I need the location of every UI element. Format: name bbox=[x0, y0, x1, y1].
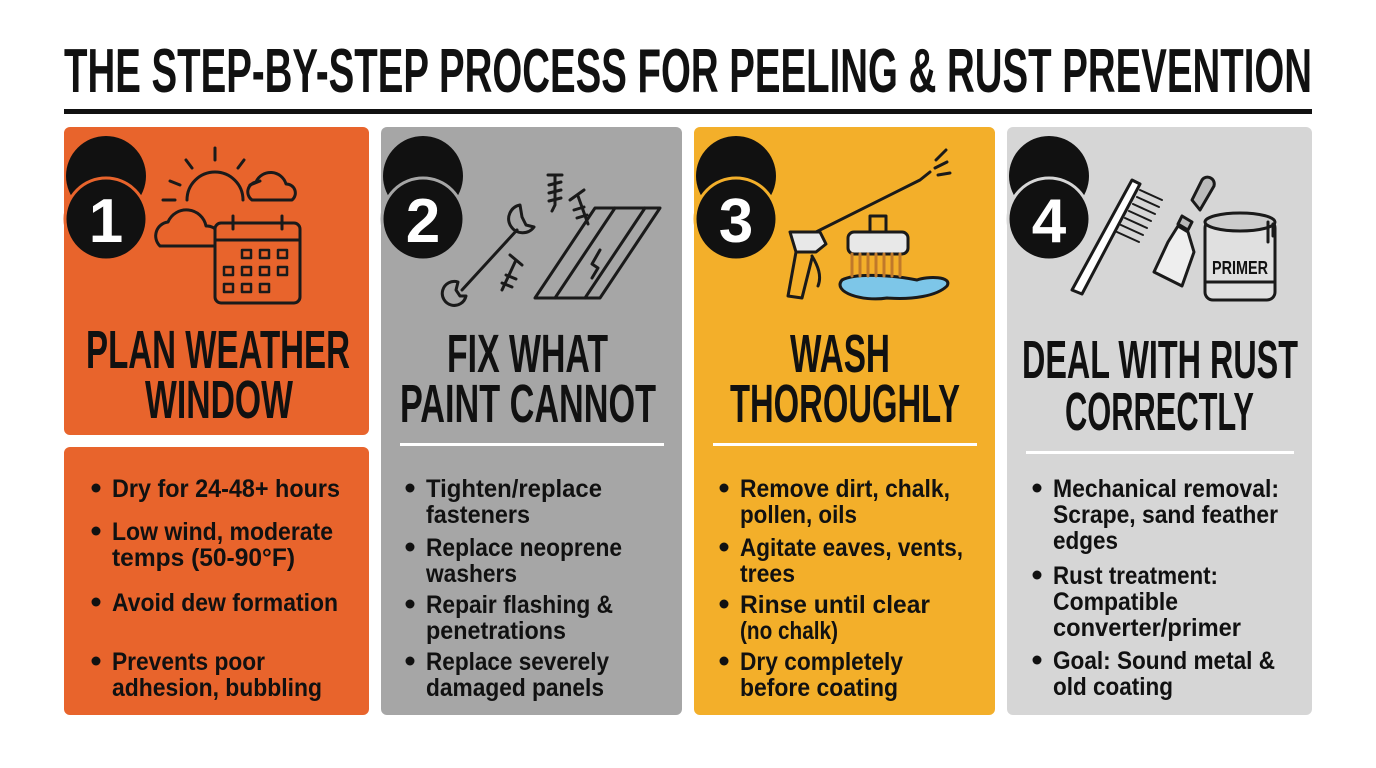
panel: step 2 fix what paint cannot bbox=[381, 127, 682, 715]
icon: wire brush scraper primer can bbox=[1072, 177, 1275, 300]
bullet list: converter/primer bbox=[1053, 614, 1241, 642]
bullet list: Tighten/replace bbox=[426, 475, 602, 503]
bullet list: Remove dirt, chalk, bbox=[740, 475, 950, 503]
bullet list: Dry completely bbox=[740, 648, 903, 676]
number badge 2: 2 bbox=[406, 187, 440, 256]
heading bbox=[1022, 330, 1298, 442]
bullet list: Repair flashing & bbox=[426, 591, 613, 619]
icon: wrench screws panel bbox=[442, 175, 660, 305]
bullet list: damaged panels bbox=[426, 674, 604, 702]
number badge 3 bbox=[695, 136, 777, 260]
bullet list: Agitate eaves, vents, bbox=[740, 534, 963, 562]
bullet list: Replace severely bbox=[426, 648, 609, 676]
bullet list: Prevents poor bbox=[112, 648, 265, 676]
heading bbox=[730, 324, 960, 434]
bullet list: edges bbox=[1053, 527, 1118, 555]
bullet list: Goal: Sound metal & bbox=[1053, 647, 1275, 675]
panel: step 1 plan weather window bbox=[64, 127, 369, 715]
bullet list: Low wind, moderate bbox=[112, 518, 333, 546]
bullet list: temps (50-90°F) bbox=[112, 544, 295, 572]
number badge 4 bbox=[1008, 136, 1090, 260]
bullet list: Scrape, sand feather bbox=[1053, 501, 1278, 529]
heading bbox=[86, 320, 350, 430]
bullet list: Compatible bbox=[1053, 588, 1178, 616]
bullet list: Mechanical removal: bbox=[1053, 475, 1279, 503]
panel: step 3 wash thoroughly bbox=[694, 127, 995, 715]
number badge 2 bbox=[382, 136, 464, 260]
heading: THOROUGHLY bbox=[730, 374, 960, 434]
heading bbox=[400, 324, 656, 434]
bullet list: fasteners bbox=[426, 501, 530, 529]
heading: PLAN WEATHER bbox=[86, 320, 350, 380]
bullet list bbox=[406, 475, 622, 702]
bullet list: before coating bbox=[740, 674, 898, 702]
number badge 1: 1 bbox=[89, 187, 123, 256]
bullet list: Avoid dew formation bbox=[112, 589, 338, 617]
bullet list: trees bbox=[740, 560, 795, 588]
bullet list: pollen, oils bbox=[740, 501, 857, 529]
number badge 1 bbox=[65, 136, 147, 260]
label: primer: PRIMER bbox=[1212, 258, 1268, 278]
number badge 3: 3 bbox=[719, 187, 753, 256]
icon: pressure washer brush bbox=[788, 150, 950, 299]
panel: step 4 deal with rust correctly bbox=[1007, 127, 1312, 715]
icon: sun clouds calendar bbox=[156, 148, 300, 303]
bullet list: (no chalk) bbox=[740, 617, 838, 645]
bullet list bbox=[1032, 475, 1279, 701]
bullet list: Replace neoprene bbox=[426, 534, 622, 562]
heading: PAINT CANNOT bbox=[400, 374, 656, 434]
heading: FIX WHAT bbox=[447, 324, 608, 384]
number badge 4: 4 bbox=[1032, 187, 1067, 256]
bullet list: Rinse until clear bbox=[740, 591, 930, 619]
bullet list: penetrations bbox=[426, 617, 566, 645]
bullet list bbox=[92, 475, 340, 702]
bullet list: old coating bbox=[1053, 673, 1173, 701]
bullet list bbox=[720, 475, 963, 702]
heading: WINDOW bbox=[145, 370, 293, 430]
bullet list: washers bbox=[425, 560, 517, 588]
heading: WASH bbox=[790, 324, 890, 384]
bullet list: Rust treatment: bbox=[1053, 562, 1218, 590]
bullet list: adhesion, bubbling bbox=[112, 674, 322, 702]
bullet list: Dry for 24-48+ hours bbox=[112, 475, 340, 503]
